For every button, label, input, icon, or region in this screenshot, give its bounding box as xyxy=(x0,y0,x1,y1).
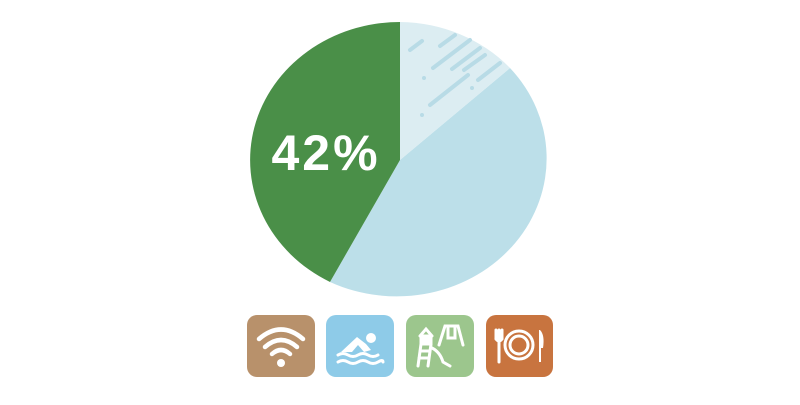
slice: green 42% xyxy=(250,22,400,282)
icon: swimming xyxy=(326,315,394,377)
pie chart xyxy=(250,22,547,296)
label: 42%: 42% xyxy=(271,125,381,181)
slice: hatched pale xyxy=(400,22,510,160)
icon: dining xyxy=(486,315,553,377)
icon: playground xyxy=(406,315,474,377)
slice: light blue large xyxy=(330,68,547,296)
icon: wifi xyxy=(247,315,315,377)
